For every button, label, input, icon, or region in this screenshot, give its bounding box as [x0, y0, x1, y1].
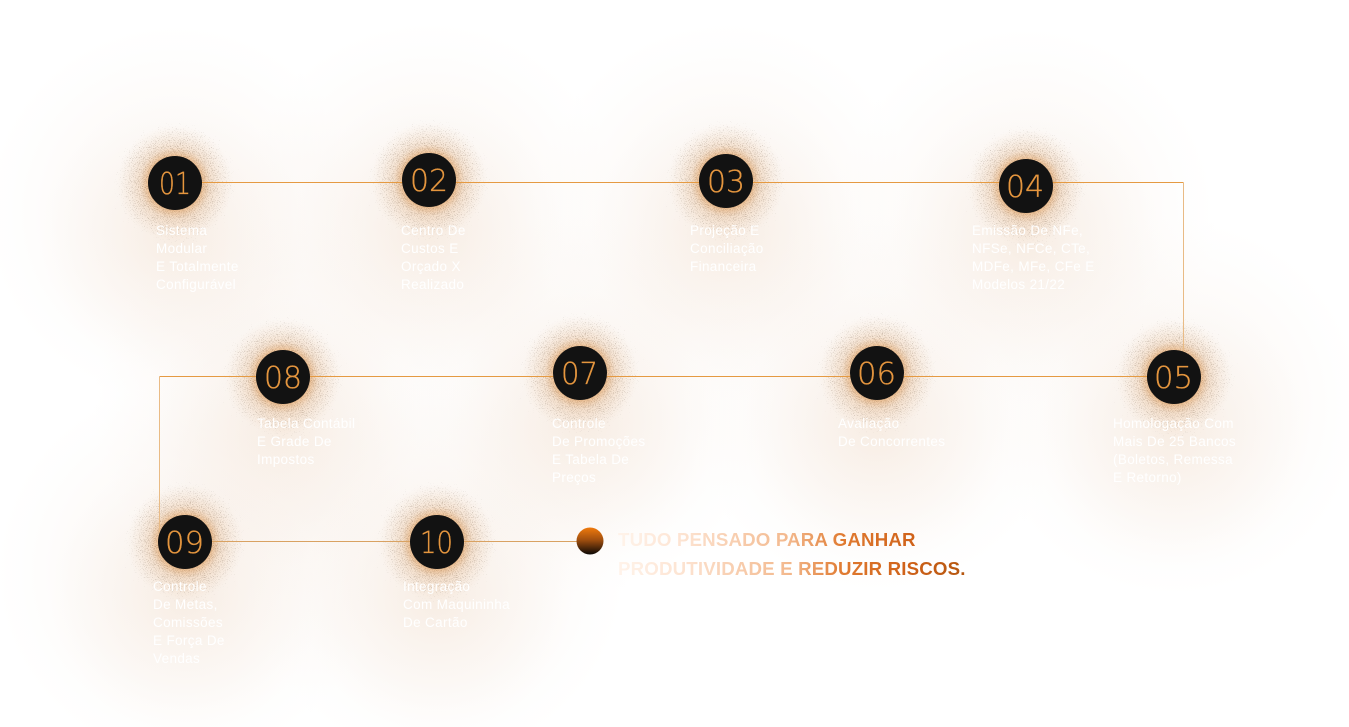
text: item 06	[838, 416, 945, 449]
marker 01: 01	[159, 167, 191, 202]
closing statement: TUDO PENSADO PARA GANHAR	[618, 529, 916, 550]
marker 01	[148, 156, 202, 210]
text: item 05	[1113, 416, 1236, 485]
marker 02	[402, 153, 456, 207]
marker 02: 02	[410, 164, 448, 199]
text: item 03: Financeira	[690, 259, 757, 274]
closing statement: PRODUTIVIDADE E REDUZIR RISCOS.	[618, 558, 966, 579]
text: item 02: Orçado X	[401, 259, 461, 274]
text: item 02	[401, 223, 466, 292]
text: item 05: E Retorno)	[1113, 470, 1182, 485]
marker 06: 06	[857, 357, 896, 392]
text: item 09: Comissões	[153, 615, 223, 630]
text: item 09: Vendas	[153, 651, 200, 666]
text: item 10	[403, 579, 510, 630]
marker 05: 05	[1154, 361, 1193, 396]
text: item 01: E Totalmente	[156, 259, 239, 274]
text: item 06: Avaliação	[838, 416, 899, 431]
text: item 10: Com Maquininha	[403, 597, 510, 612]
marker 08	[256, 350, 310, 404]
text: item 04: NFSe, NFCe, CTe,	[972, 241, 1090, 256]
grainy orange halos	[91, 96, 1258, 626]
marker 09: 09	[165, 526, 204, 561]
marker 08: 08	[264, 361, 302, 396]
marker 10	[410, 515, 464, 569]
marker 04: 04	[1006, 170, 1044, 205]
text: item 03	[690, 223, 764, 274]
marker 04	[999, 159, 1053, 213]
text: item 10: De Cartão	[403, 615, 468, 630]
closing statement	[618, 529, 966, 579]
text: item 05: (Boletos, Remessa	[1113, 452, 1233, 467]
text: item 09: Controle	[153, 579, 207, 594]
marker 05	[1147, 350, 1201, 404]
text: item 08: Tabela Contábil	[257, 416, 355, 431]
text: item 07: Preços	[552, 470, 596, 485]
text: item 02: Realizado	[401, 277, 464, 292]
text: item 06: De Concorrentes	[838, 434, 945, 449]
marker 07	[553, 346, 607, 400]
text: item 01: Sistema	[156, 223, 207, 238]
text: item 04: Emissão De NFe,	[972, 223, 1083, 238]
text: item 07: Controle	[552, 416, 606, 431]
text: item 03: Conciliação	[690, 241, 764, 256]
text: item 09	[153, 579, 225, 666]
text: item 07: E Tabela De	[552, 452, 629, 467]
text: item 01: Configurável	[156, 277, 236, 292]
text: item 08: E Grade De	[257, 434, 332, 449]
text: item 07	[552, 416, 646, 485]
text: item 09: De Metas,	[153, 597, 218, 612]
text: item 07: De Promoções	[552, 434, 646, 449]
text: item 08	[257, 416, 355, 467]
text: item 10: Integração	[403, 579, 470, 594]
text: item 05: Mais De 25 Bancos	[1113, 434, 1236, 449]
text: item 02: Centro De	[401, 223, 466, 238]
marker 06	[850, 346, 904, 400]
marker 07: 07	[561, 357, 598, 392]
text: item 09: E Força De	[153, 633, 225, 648]
marker 03	[699, 154, 753, 208]
text: item 04	[972, 223, 1095, 292]
marker 09	[158, 515, 212, 569]
marker 10: 10	[420, 526, 453, 561]
text: item 01: Modular	[156, 241, 207, 256]
end ball	[576, 528, 604, 554]
text: item 03: Projeção E	[690, 223, 760, 238]
text: item 04: MDFe, MFe, CFe E	[972, 259, 1095, 274]
marker 03: 03	[707, 165, 745, 200]
text: item 05: Homologação Com	[1113, 416, 1234, 431]
text: item 02: Custos E	[401, 241, 459, 256]
connector line	[160, 182, 1184, 542]
text: item 01	[156, 223, 239, 292]
text: item 04: Modelos 21/22	[972, 277, 1065, 292]
text: item 08: Impostos	[257, 452, 315, 467]
